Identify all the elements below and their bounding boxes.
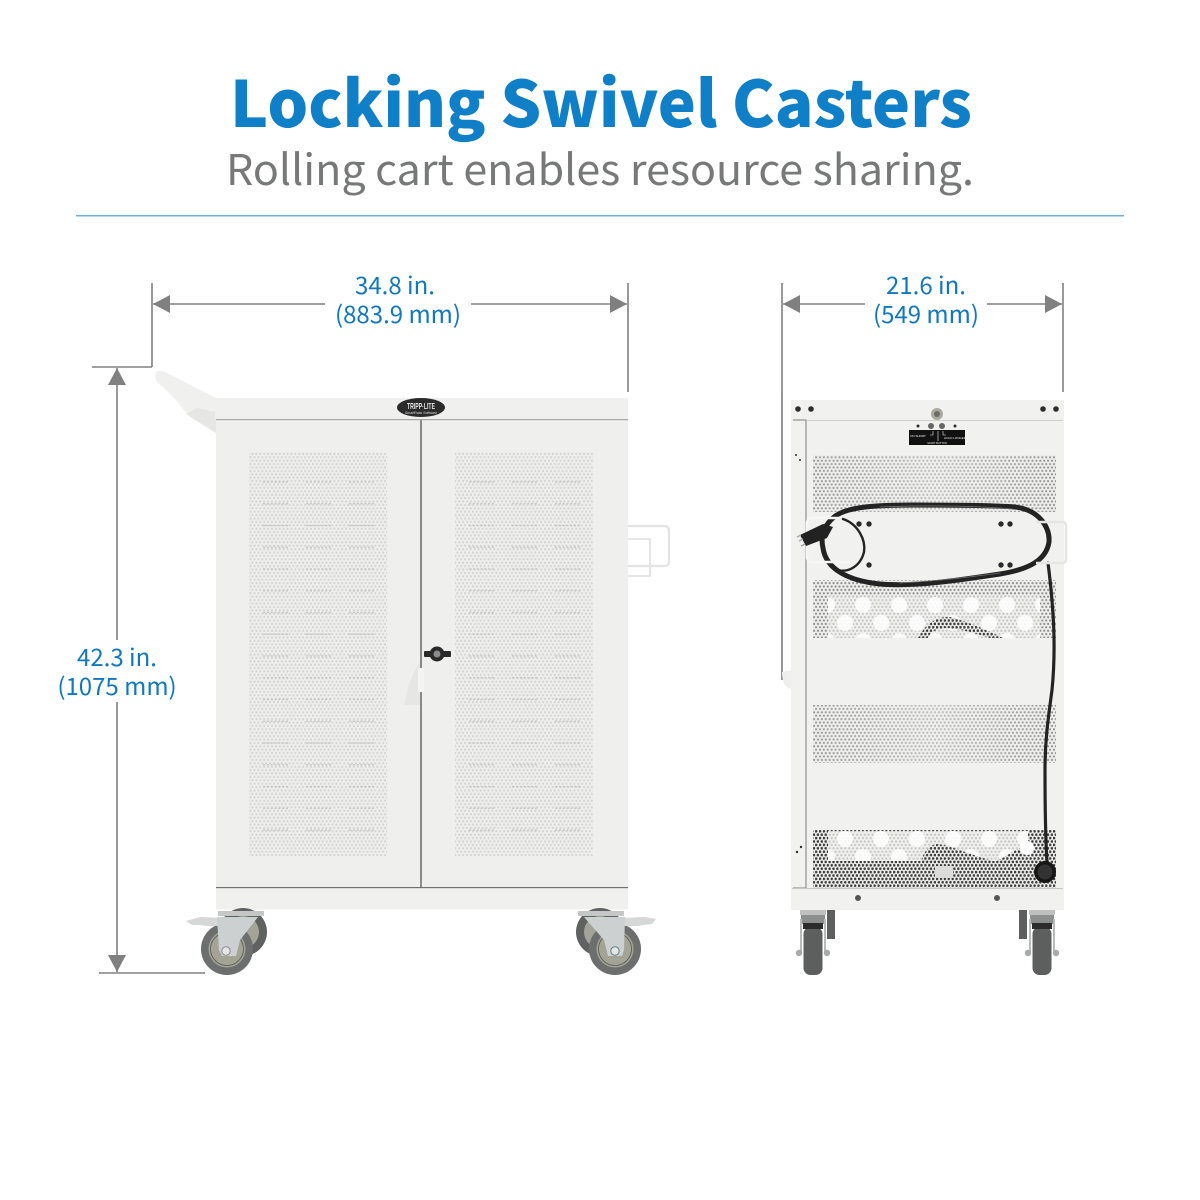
- dimension: height: (1075 mm): [57, 667, 177, 702]
- casters: [796, 910, 1059, 975]
- logo badge: SmartRack Software: [405, 411, 437, 415]
- label plate: HOLD LONGER: [944, 436, 967, 440]
- icon: push handle: [155, 371, 216, 433]
- front view cart: [155, 371, 669, 975]
- rear left caster: [219, 908, 267, 956]
- perforated vent 1: [813, 455, 1056, 512]
- front right caster: [578, 911, 656, 975]
- dimension: front width: [152, 266, 628, 392]
- subtitle: Rolling cart enables resource sharing.: [226, 137, 974, 198]
- label plate: START BUTTON: [927, 441, 947, 445]
- title: Locking Swivel Casters: [230, 54, 972, 146]
- logo badge: [397, 398, 445, 417]
- perforated vent 3: [813, 705, 1056, 763]
- side view cart: [782, 392, 1066, 975]
- dimension: front width: (883.9 mm): [335, 295, 461, 330]
- cord grommet: [1034, 861, 1056, 883]
- left door: [216, 420, 420, 888]
- label plate: [909, 430, 967, 445]
- bracket screws: [856, 521, 1013, 568]
- dimension: side width: [782, 266, 1063, 392]
- logo badge: TRIPP·LITE: [407, 401, 435, 411]
- dimension: side width: (549 mm): [873, 295, 979, 330]
- cord wrap hook: [807, 518, 1066, 563]
- base panel: [216, 888, 628, 910]
- dimension: height: [57, 367, 205, 973]
- rear right caster: [576, 908, 624, 956]
- dimension: front width: 34.8 in.: [355, 266, 435, 301]
- key lock: [931, 408, 943, 420]
- cart body: [791, 400, 1064, 910]
- dimension: side width: 21.6 in.: [886, 266, 966, 301]
- perforated vent 4: [813, 830, 1056, 888]
- dimension: height: 42.3 in.: [77, 638, 157, 673]
- perforated vent 2: [813, 580, 1056, 638]
- icon: wire cord hook: [627, 526, 669, 576]
- top panel: [215, 398, 628, 420]
- side handle: [782, 392, 792, 689]
- front left caster: [186, 911, 264, 975]
- power cord: [822, 505, 1054, 862]
- top screws: [795, 406, 1059, 901]
- plug: [797, 524, 833, 546]
- icon: door lock: [404, 646, 451, 705]
- label plate: ON SHORT: [910, 434, 926, 438]
- right door: [422, 420, 628, 888]
